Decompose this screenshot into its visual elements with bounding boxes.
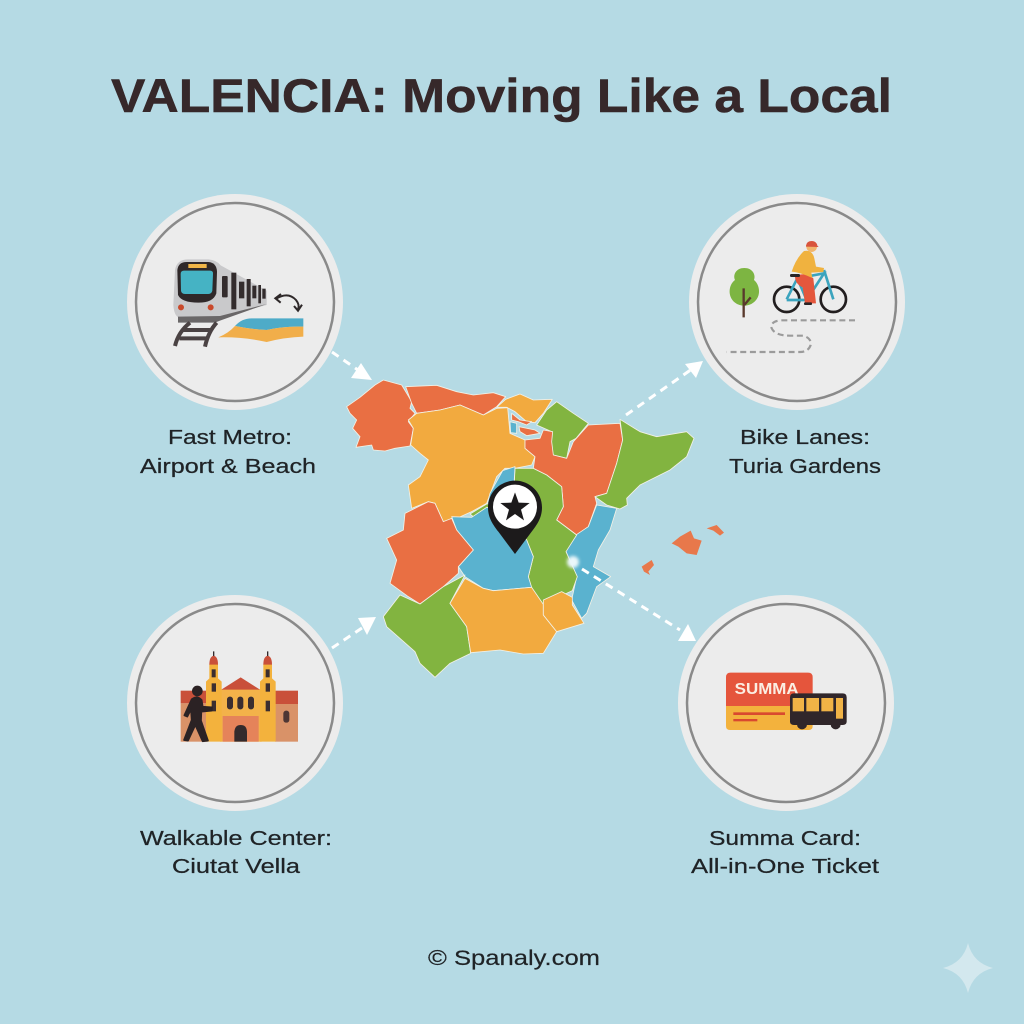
arrow: map to summa card xyxy=(582,569,696,641)
label: bike lanes: Turia Gardens xyxy=(729,455,881,478)
region: western Andalusia xyxy=(383,575,471,677)
arrow: walkable center to map xyxy=(332,617,376,648)
label: summa card: All-in-One Ticket xyxy=(691,855,879,878)
region: eastern Andalusia xyxy=(450,578,557,654)
region: Castilla-La Mancha xyxy=(513,468,577,604)
icon: summa card and bus: SUMMA xyxy=(735,681,799,698)
panel: fast metro xyxy=(127,194,343,410)
region: Galicia xyxy=(347,380,415,451)
icon: metro train and beach xyxy=(173,259,303,347)
panel: bike lanes xyxy=(689,194,905,410)
Balearic Islands xyxy=(642,525,724,575)
region: Madrid xyxy=(487,467,515,507)
title: VALENCIA: Moving Like a Local xyxy=(111,69,892,122)
icon: sparkle xyxy=(943,943,993,993)
region: Extremadura xyxy=(387,502,473,604)
label: bike lanes: Bike Lanes: xyxy=(740,426,870,449)
label: fast metro: Airport & Beach xyxy=(140,455,316,478)
arrow: map to bike lanes xyxy=(626,361,703,415)
icon: tree and cyclist xyxy=(727,241,855,352)
icon: summa card and bus xyxy=(726,673,847,730)
region: Aragon xyxy=(525,423,623,535)
icon: cathedral and walker xyxy=(181,651,298,742)
panel: summa card xyxy=(678,595,894,811)
label: fast metro: Fast Metro: xyxy=(168,426,292,449)
label: summa card: Summa Card: xyxy=(709,827,861,850)
map pin xyxy=(488,481,542,554)
region: Valencia xyxy=(566,505,617,618)
arrow: metro to map xyxy=(332,352,372,380)
region: Rioja patches xyxy=(512,413,540,436)
region: Castile and Leon xyxy=(408,405,535,522)
panel: walkable center xyxy=(127,595,343,811)
region: Alava patch xyxy=(510,422,517,433)
footer credit: © Spanaly.com xyxy=(428,947,600,970)
region: Catalonia xyxy=(595,419,694,509)
map of Spain xyxy=(347,380,724,677)
region: central blue xyxy=(452,507,533,591)
region: Murcia xyxy=(543,592,584,632)
map glow spot xyxy=(567,556,579,568)
label: walkable center: Walkable Center: xyxy=(140,827,332,850)
region: green patch xyxy=(470,503,500,517)
region: Asturias and Cantabria xyxy=(406,385,506,415)
label: walkable center: Ciutat Vella xyxy=(172,855,301,878)
region: Navarre xyxy=(537,402,588,458)
region: Basque Country xyxy=(497,394,552,423)
